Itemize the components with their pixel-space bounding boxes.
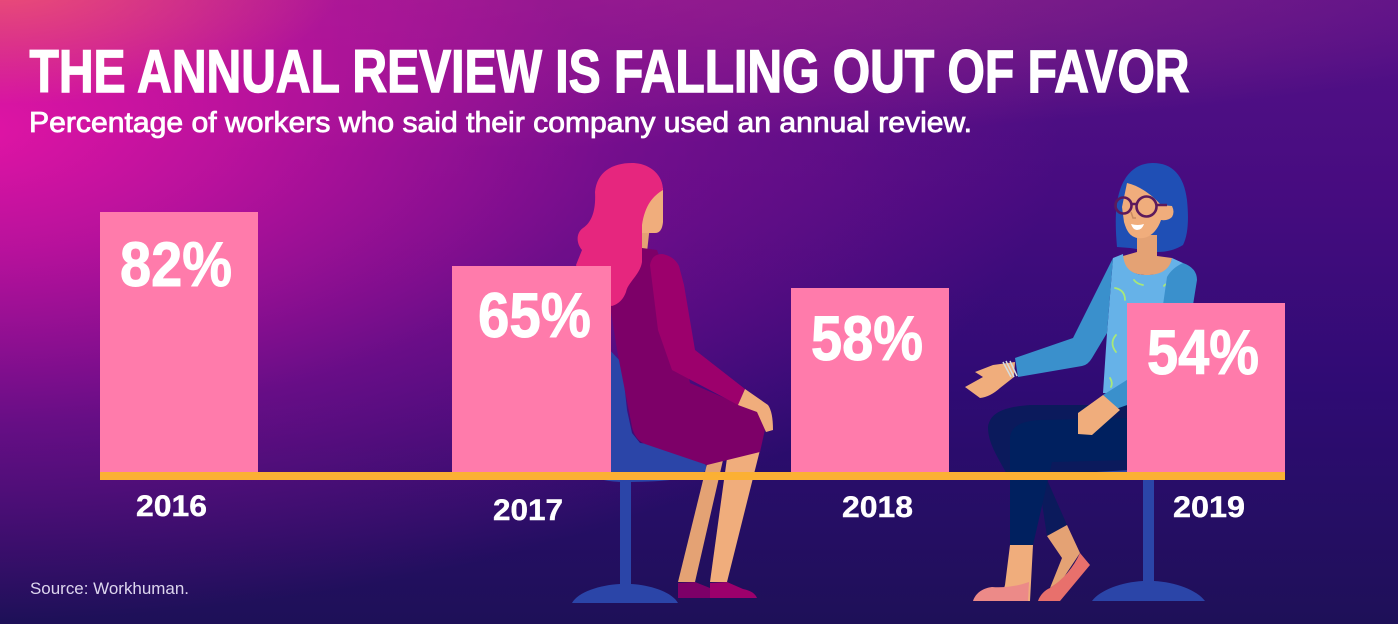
shoe: crossed [1038, 553, 1090, 601]
shirt [1103, 254, 1193, 395]
nose [1131, 212, 1136, 218]
foot: standing [1000, 545, 1033, 601]
neck [640, 225, 650, 252]
value 65%: 65% [478, 281, 591, 351]
back leg [678, 460, 723, 582]
year 2016: 2016 [136, 490, 207, 523]
face [640, 188, 663, 233]
foot: crossed [1047, 525, 1080, 588]
hand reaching [965, 362, 1015, 398]
far sleeve [1163, 263, 1197, 305]
shirt pattern [1110, 280, 1167, 387]
chair: left [572, 345, 707, 603]
illustration: woman with pink hair on chair [572, 163, 773, 603]
dress [610, 248, 766, 465]
chair: right [1063, 460, 1205, 601]
arm [1015, 258, 1113, 377]
sleeve [650, 254, 745, 405]
bar 2016 [100, 212, 258, 473]
bracelets [1003, 361, 1017, 377]
legs: front [1010, 418, 1130, 545]
bar 2018 [791, 288, 949, 473]
bar chart [100, 212, 1285, 527]
neck and chest [1123, 235, 1172, 275]
value 58%: 58% [811, 304, 923, 374]
value 54%: 54% [1147, 318, 1259, 388]
year 2019: 2019 [1173, 491, 1245, 524]
illustration: woman with blue hair on chair [965, 163, 1205, 601]
hair [576, 163, 663, 306]
source note: Source: Workhuman. [30, 580, 189, 598]
year 2018: 2018 [842, 491, 913, 524]
glasses [1116, 196, 1167, 216]
legs: back [988, 405, 1130, 536]
bar 2019 [1127, 303, 1285, 473]
axis line [100, 472, 1285, 480]
hair [1116, 163, 1188, 252]
front leg [710, 450, 760, 582]
value 82%: 82% [120, 230, 232, 300]
hand on knee [1078, 395, 1120, 435]
back shoe [678, 582, 710, 598]
year 2017: 2017 [493, 494, 563, 527]
smile [1131, 224, 1144, 230]
face [1122, 183, 1174, 238]
shoe: standing [973, 582, 1029, 601]
subtitle: Percentage of workers who said their company used an annual review. [29, 107, 972, 139]
front shoe [710, 582, 757, 598]
bar 2017 [452, 266, 611, 473]
lower sleeve [1103, 378, 1130, 410]
hand [738, 389, 773, 432]
